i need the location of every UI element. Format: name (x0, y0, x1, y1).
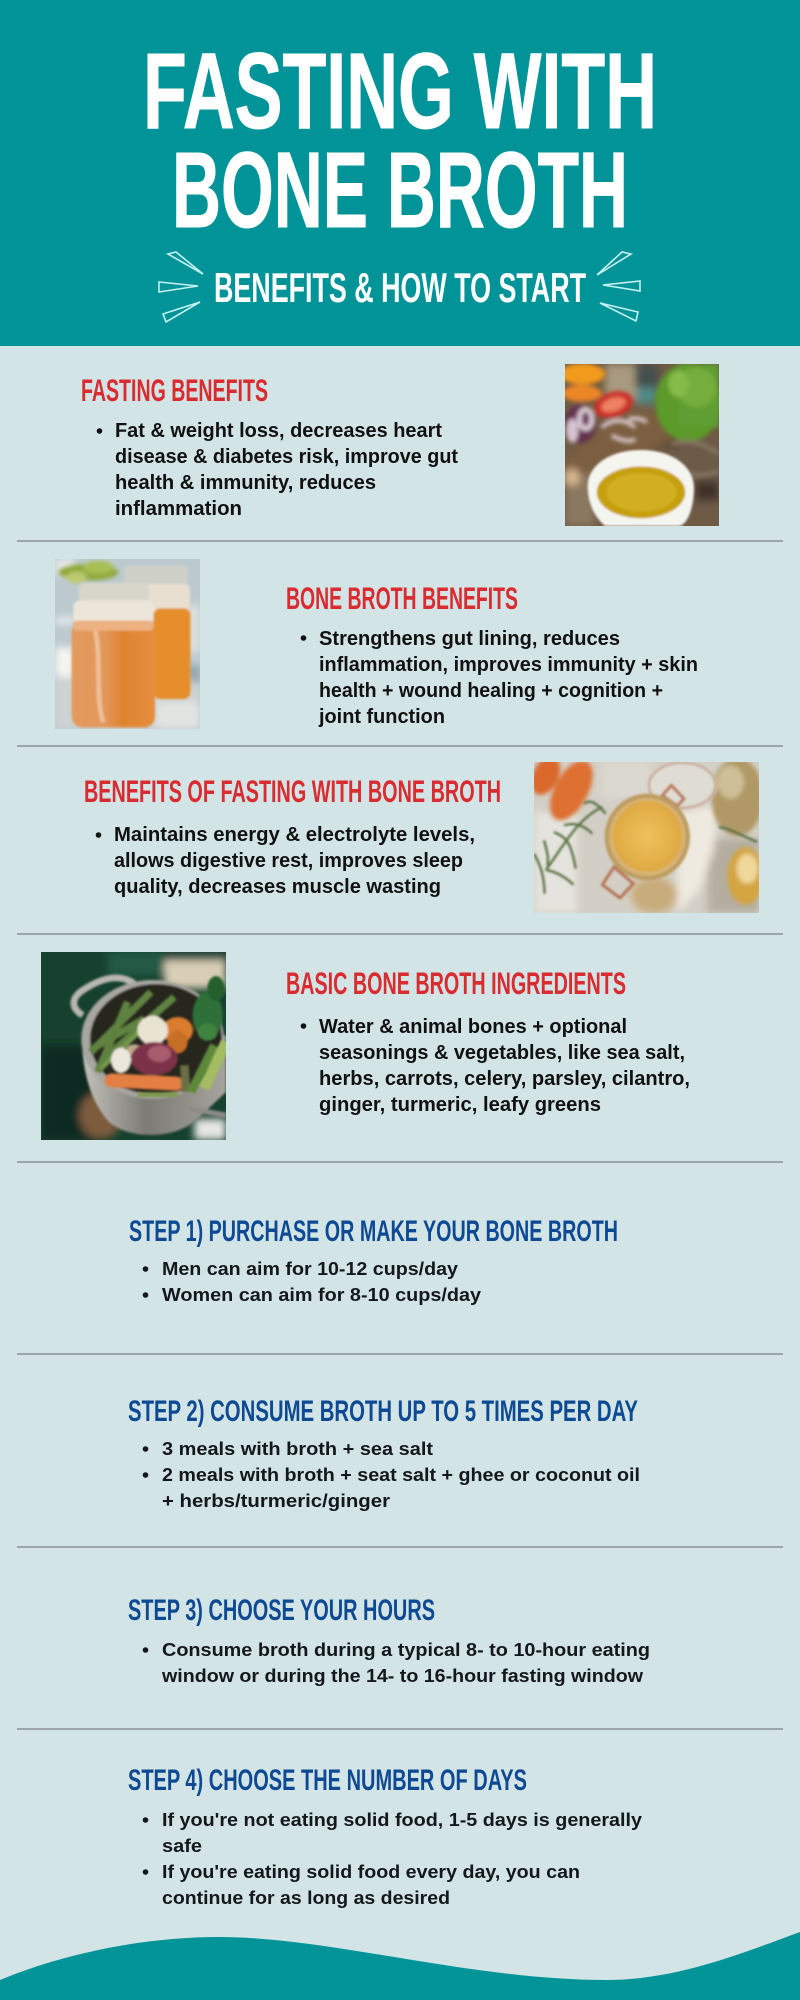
title (143, 30, 657, 250)
text block (96, 824, 475, 898)
panel: step 1 (129, 1215, 618, 1305)
icon: right rays (597, 252, 640, 321)
photo: jar of broth on linen (534, 762, 759, 913)
text block (143, 1810, 642, 1908)
text block: inflammation, improves immunity + skin (319, 654, 698, 676)
text block: 3 meals with broth + sea salt (162, 1439, 433, 1459)
text block: Water & animal bones + optional (319, 1016, 627, 1038)
icon: left rays (159, 252, 203, 322)
text block: Strengthens gut lining, reduces (319, 628, 620, 650)
text block: disease & diabetes risk, improve gut (115, 446, 458, 468)
heading: BENEFITS OF FASTING WITH BONE BROTH (84, 773, 501, 809)
heading: STEP 3) CHOOSE YOUR HOURS (128, 1594, 435, 1627)
text block: health + wound healing + cognition + (319, 680, 663, 702)
heading: BONE BROTH BENEFITS (286, 580, 518, 616)
panel: step 4 (128, 1764, 642, 1908)
text block: safe (162, 1836, 202, 1856)
footer wave (0, 1932, 800, 2000)
divider (17, 540, 783, 542)
text block: herbs, carrots, celery, parsley, cilantro, (319, 1068, 690, 1090)
photo: jars of broth (55, 559, 200, 729)
heading: STEP 4) CHOOSE THE NUMBER OF DAYS (128, 1764, 527, 1797)
divider (17, 1161, 783, 1163)
photo: stock pot with vegetables (41, 952, 226, 1140)
text block: 2 meals with broth + seat salt + ghee or coconut oil (162, 1465, 640, 1485)
text block (301, 628, 698, 728)
panel: fasting benefits (81, 363, 727, 526)
text block: window or during the 14- to 16-hour fasting window (161, 1666, 644, 1686)
divider (17, 1728, 783, 1730)
text block: inflammation (115, 498, 242, 520)
text block: Men can aim for 10-12 cups/day (162, 1259, 458, 1279)
text block: seasonings & vegetables, like sea salt, (319, 1042, 685, 1064)
text block: If you're not eating solid food, 1-5 days is generally (162, 1810, 642, 1830)
text block (143, 1259, 481, 1305)
text block: continue for as long as desired (162, 1888, 450, 1908)
panel: step 2 (128, 1395, 640, 1511)
text block: Consume broth during a typical 8- to 10-hour eating (162, 1640, 650, 1660)
photo: bowl of broth with vegetables (560, 363, 727, 526)
panel: bone broth benefits (55, 559, 698, 729)
panel: benefits of fasting with bone broth (84, 751, 764, 914)
heading: FASTING BENEFITS (81, 372, 268, 408)
divider (17, 933, 783, 935)
text block: Women can aim for 8-10 cups/day (162, 1285, 481, 1305)
text block: quality, decreases muscle wasting (114, 876, 441, 898)
text block: joint function (318, 706, 445, 728)
subtitle: BENEFITS & HOW TO START (214, 264, 586, 311)
text block: health & immunity, reduces (115, 472, 376, 494)
text block (143, 1439, 640, 1511)
divider (17, 745, 783, 747)
text block (143, 1640, 650, 1686)
text block: Maintains energy & electrolyte levels, (114, 824, 475, 846)
divider (17, 1353, 783, 1355)
text block: Fat & weight loss, decreases heart (115, 420, 442, 442)
header banner (0, 0, 800, 346)
text block (97, 420, 458, 520)
text block: ginger, turmeric, leafy greens (319, 1094, 601, 1116)
text block: allows digestive rest, improves sleep (114, 850, 463, 872)
divider (17, 1546, 783, 1548)
panel: step 3 (128, 1594, 650, 1686)
panel: basic bone broth ingredients (41, 952, 690, 1140)
text block: + herbs/turmeric/ginger (162, 1491, 390, 1511)
text block (301, 1016, 690, 1116)
text block: If you're eating solid food every day, you can (162, 1862, 580, 1882)
